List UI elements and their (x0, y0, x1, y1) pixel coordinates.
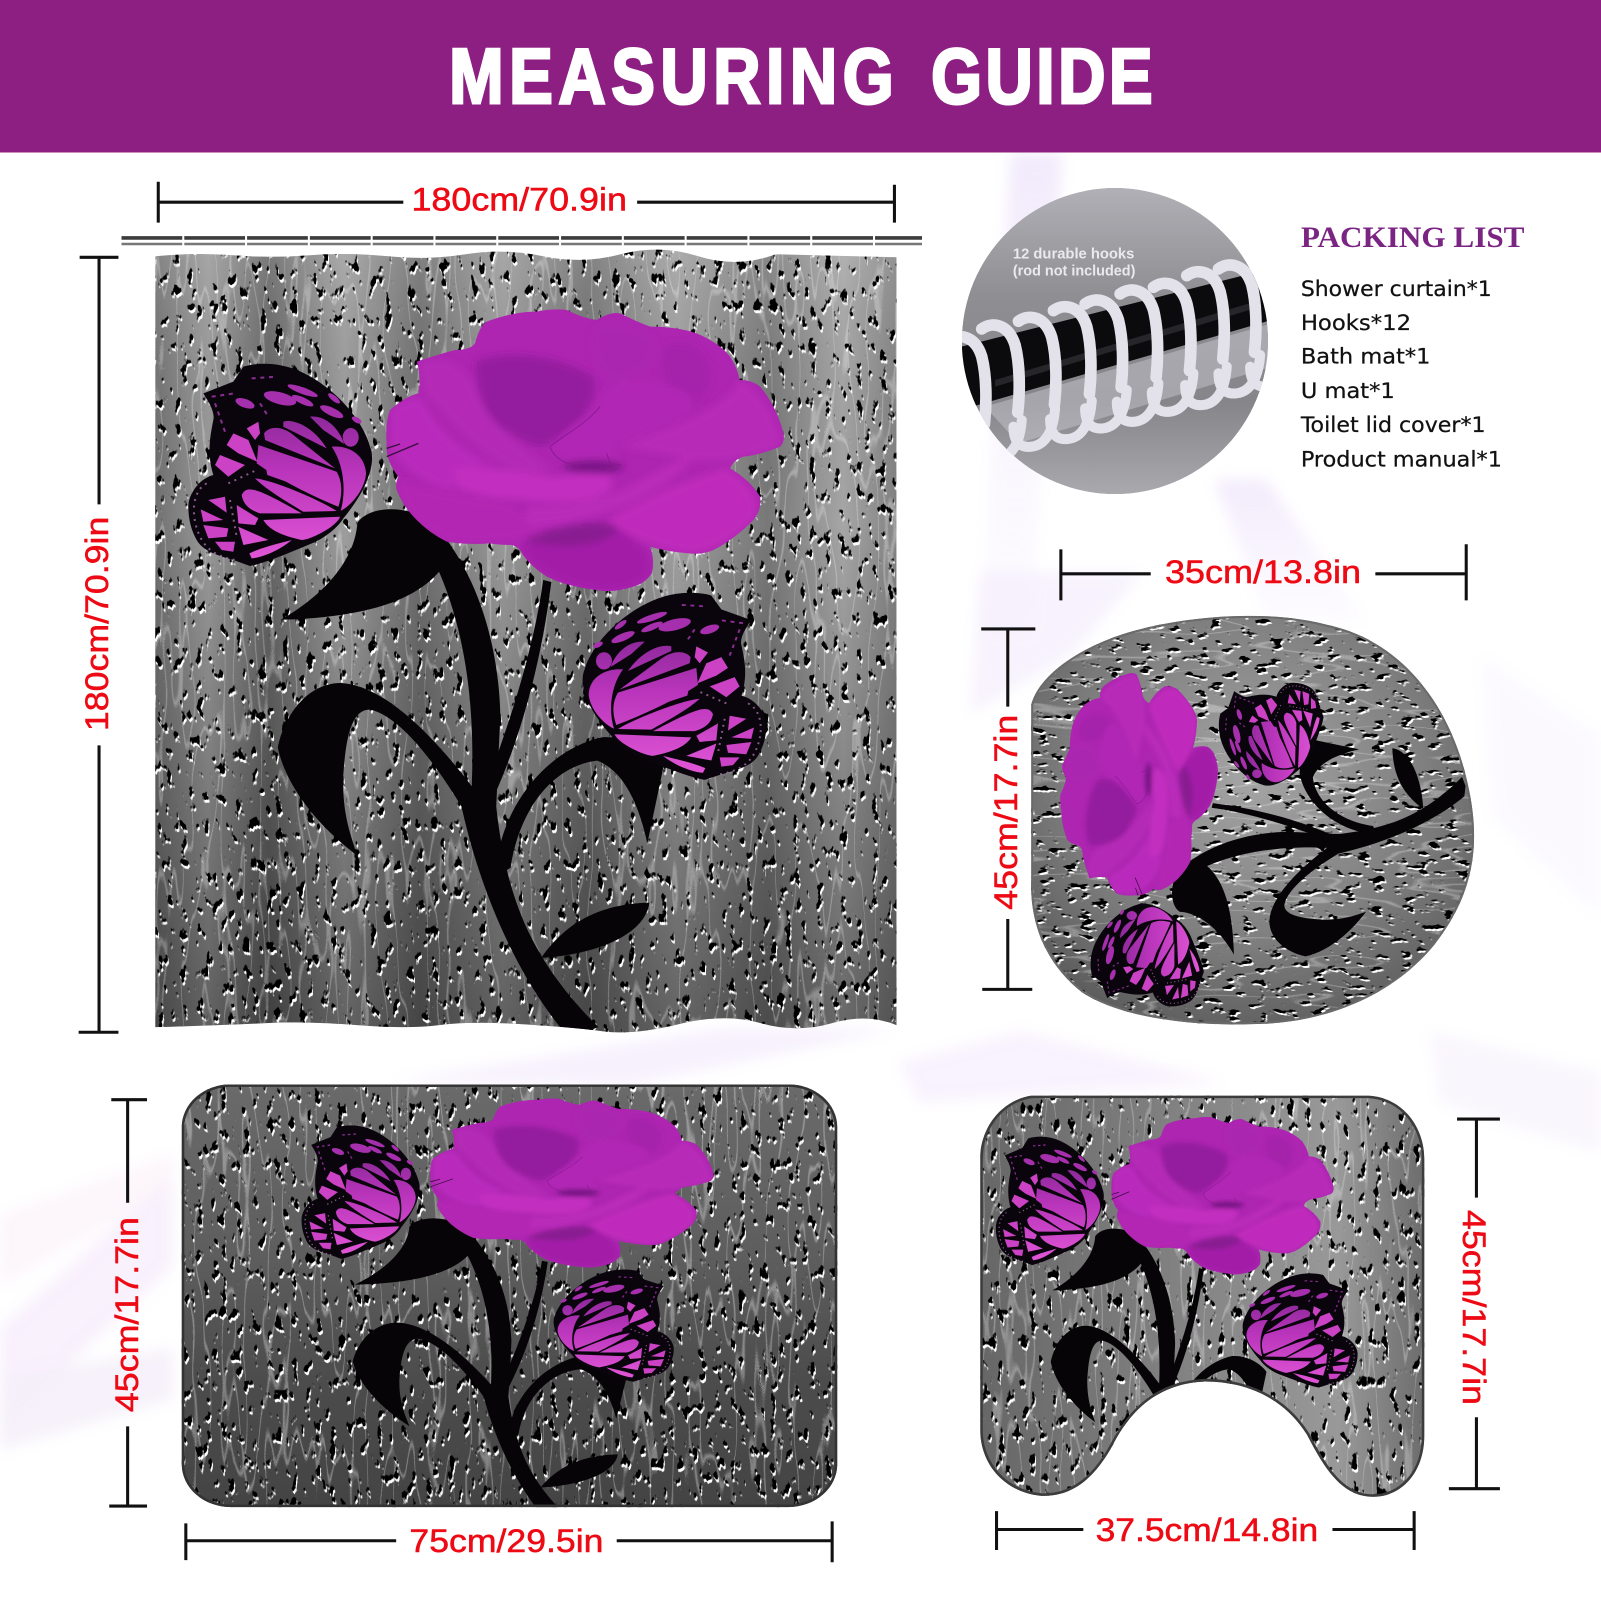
packing list items: Hooks*12 (1301, 311, 1411, 336)
lid width dimension (1061, 544, 1466, 600)
title: GUIDE (931, 34, 1152, 120)
U mat height dimension: 45cm/17.7in (1456, 1210, 1493, 1405)
packing list items: Bath mat*1 (1301, 344, 1430, 369)
U mat width dimension (997, 1511, 1414, 1550)
header banner (0, 0, 1601, 152)
U mat height dimension (1449, 1119, 1500, 1489)
bath mat width dimension (186, 1521, 832, 1562)
packing list items: U mat*1 (1301, 379, 1395, 404)
hooks art (948, 265, 1292, 459)
packing list (1300, 222, 1525, 473)
panel: bath mat (182, 1084, 837, 1533)
curtain width dimension (158, 180, 894, 223)
title (449, 34, 1152, 120)
curtain width dimension: 180cm/70.9in (411, 180, 627, 217)
lid width dimension: 35cm/13.8in (1165, 553, 1361, 590)
panel: U mat (975, 1093, 1429, 1522)
packing list items: Product manual*1 (1301, 448, 1502, 473)
hooks caption: (rod not included) (1013, 264, 1136, 280)
title: MEASURING (449, 34, 894, 120)
lid height dimension (981, 629, 1035, 989)
panel: hooks circle (962, 188, 1268, 494)
panel: toilet lid cover (1021, 608, 1481, 1031)
U mat width dimension: 37.5cm/14.8in (1096, 1511, 1318, 1548)
curtain rod (122, 238, 922, 244)
hooks caption (1013, 246, 1136, 280)
lid height dimension: 45cm/17.7in (987, 715, 1024, 910)
panel: shower curtain (148, 245, 904, 1036)
curtain height dimension: 180cm/70.9in (78, 517, 115, 731)
hook rod (962, 273, 1267, 406)
packing list items: Toilet lid cover*1 (1300, 413, 1486, 438)
curtain height dimension (78, 257, 118, 1032)
packing list items: Shower curtain*1 (1301, 277, 1492, 302)
packing list items (1300, 277, 1502, 473)
bath mat width dimension: 75cm/29.5in (409, 1522, 603, 1559)
bath mat height dimension (108, 1100, 147, 1506)
bath mat height dimension: 45cm/17.7in (108, 1217, 145, 1412)
hook rings (962, 259, 1266, 456)
packing list heading: PACKING LIST (1301, 222, 1525, 254)
hooks caption: 12 durable hooks (1013, 246, 1134, 262)
